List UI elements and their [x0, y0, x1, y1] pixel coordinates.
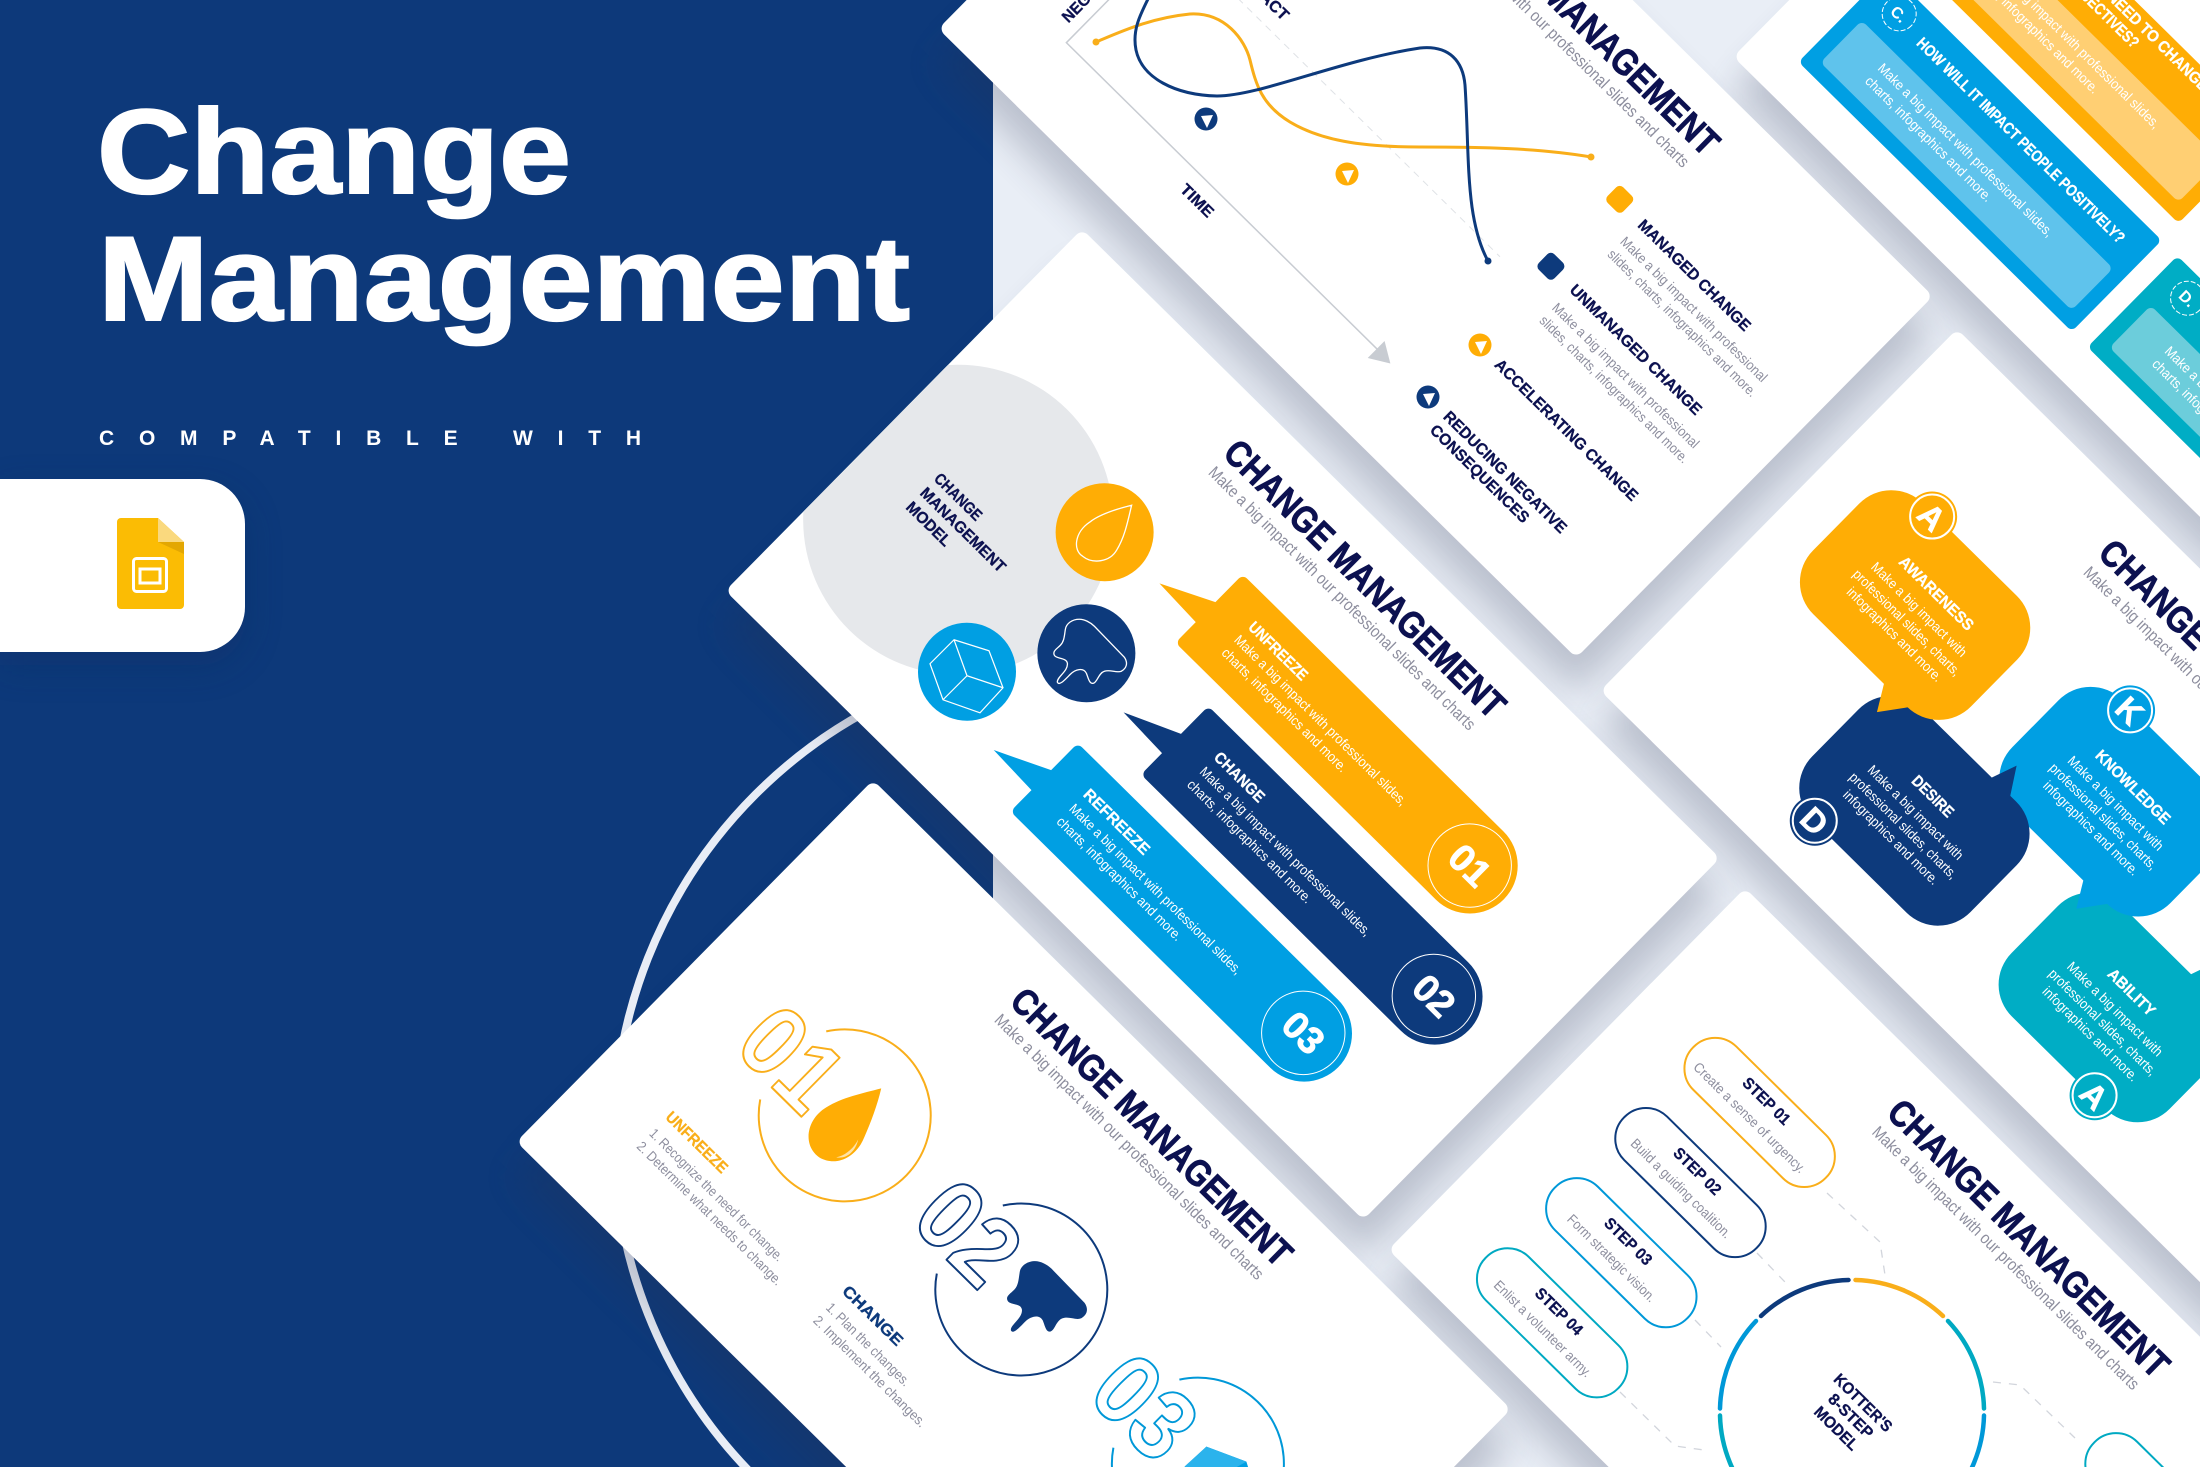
- title: Change: [97, 85, 571, 219]
- pill: step 01: Create a sense of urgency.: [1690, 1059, 1809, 1176]
- slide heading: Make a big impact with our professional slides and charts: [1868, 1123, 2143, 1394]
- bar: change: [1101, 667, 1502, 1064]
- bubble: knowledge: K: [2108, 689, 2151, 732]
- bar: refreeze: REFREEZE: [1080, 786, 1153, 859]
- step 01 circle and drop: [669, 939, 1017, 1287]
- bubble: ability: infographics and more.: [2039, 983, 2142, 1084]
- bubble: ability: A: [2073, 1074, 2116, 1117]
- bubble: desire: infographics and more.: [1840, 787, 1942, 888]
- bar: change: charts, infographics and more.: [1184, 776, 1316, 906]
- legend: unmanaged change: Make a big impact with professional: [1549, 299, 1703, 451]
- bubble: ability: ABILITY: [2104, 966, 2159, 1020]
- model label: CHANGE: [930, 470, 985, 525]
- model label: MANAGEMENT: [916, 485, 1009, 576]
- step 01 text: UNFREEZE: [662, 1109, 731, 1177]
- marker: navy legend: [1416, 386, 1440, 408]
- bubble: awareness: professional slides, charts,: [1850, 566, 1964, 679]
- step 02 text: [810, 1283, 959, 1430]
- bar: unfreeze: UNFREEZE: [1245, 619, 1311, 684]
- gray model circle: [803, 364, 1109, 670]
- pill: step 01: STEP 01: [1739, 1075, 1793, 1129]
- bubble: ability: Make a big impact with: [2064, 958, 2166, 1059]
- bubble: ability: professional slides, charts,: [2046, 965, 2160, 1079]
- pill: step 05: [2073, 1421, 2200, 1467]
- legend: reducing negative consequences: CONSEQUENCES: [1426, 422, 1532, 527]
- axis label: time: TIME: [1176, 181, 1217, 222]
- pill: step 02: STEP 02: [1669, 1145, 1724, 1199]
- centre label: [1804, 1371, 1895, 1462]
- marker: yellow legend: [1468, 334, 1492, 356]
- box: blue question: Make a big impact with professional slides,: [1875, 60, 2057, 240]
- chart axes: [1057, 0, 1609, 374]
- legend: accelerating change: ACCELERATING CHANGE: [1491, 356, 1641, 505]
- pill: step 02: Build a guiding coalition.: [1628, 1135, 1735, 1241]
- bar: refreeze: [971, 704, 1372, 1101]
- bubble: knowledge: professional slides, charts,: [2046, 760, 2161, 873]
- icon: melting splat: [1017, 582, 1159, 723]
- pill: step 01: [1672, 1025, 1847, 1199]
- bubble: knowledge: Make a big impact with: [2065, 752, 2167, 854]
- step 02 text: 2. Implement the changes.: [810, 1312, 930, 1430]
- icon: ice cube: [893, 602, 1040, 749]
- bubble: awareness: AWARENESS: [1895, 554, 1977, 635]
- model label: MODEL: [902, 499, 954, 550]
- pill: step 02: [1603, 1096, 1778, 1270]
- legend: unmanaged change: slides, charts, infographics and more.: [1536, 312, 1692, 466]
- centre label: MODEL: [1810, 1404, 1861, 1455]
- legend: unmanaged change: UNMANAGED CHANGE: [1566, 282, 1705, 419]
- model label: [902, 470, 1023, 590]
- curve: unmanaged change: [1135, 0, 1492, 264]
- box: blue question: C.: [1886, 3, 1910, 27]
- slide: questions (top right): [1715, 0, 2200, 722]
- box: teal question: [2087, 256, 2200, 617]
- bar: unfreeze: Make a big impact with professional slides,: [1231, 632, 1411, 809]
- title: Management: [98, 212, 910, 346]
- step 03 circle and cube: [1022, 1288, 1370, 1467]
- bar: refreeze: 03: [1273, 1004, 1332, 1063]
- marker: navy chart: [1194, 108, 1218, 130]
- bar: unfreeze: 01: [1439, 837, 1499, 896]
- bubble: desire: professional slides, charts,: [1846, 769, 1961, 882]
- slide heading: Make a big impact with our professional slides and charts: [991, 1010, 1267, 1284]
- box: blue question: HOW WILL IT IMPACT PEOPLE POSITIVELY?: [1913, 35, 2128, 247]
- bar: change: Make a big impact with professional slides,: [1197, 763, 1375, 939]
- legend: managed change: [1575, 184, 1793, 400]
- legend: reducing negative consequences: REDUCING NEGATIVE: [1440, 408, 1570, 537]
- slide heading: CHANGE MANAGEMENT: [1216, 432, 1514, 726]
- slide: change curve chart (top): [920, 0, 1951, 694]
- slide: three steps (bottom left): [498, 780, 1529, 1467]
- pill: step 03: STEP 03: [1600, 1215, 1655, 1269]
- box: yellow question: [1905, 0, 2200, 223]
- bubble: awareness: Make a big impact with: [1868, 559, 1971, 660]
- title: [97, 85, 910, 346]
- bubble: ability: [1964, 855, 2200, 1157]
- slide heading: CHANGE MANAGEMENT: [1003, 980, 1301, 1275]
- bubble: desire: Make a big impact with: [1865, 762, 1967, 863]
- bar: change: CHANGE: [1210, 749, 1268, 806]
- curve: managed change: [1092, 14, 1594, 161]
- centre label: 8-STEP: [1824, 1391, 1876, 1442]
- step 01 text: 1. Recognize the need for change.: [646, 1125, 787, 1264]
- pill: step 04: STEP 04: [1531, 1285, 1586, 1339]
- legend: managed change: MANAGED CHANGE: [1634, 217, 1754, 335]
- bar: unfreeze: charts, infographics and more.: [1219, 644, 1351, 775]
- slide: change management model (centre): [680, 202, 1738, 1256]
- navy background panel: [0, 0, 993, 1467]
- pill: step 04: [1465, 1236, 1640, 1410]
- bubble: awareness: [1764, 456, 2064, 756]
- pill: step 03: Form strategic vision.: [1564, 1211, 1659, 1305]
- legend: managed change: Make a big impact with professional: [1617, 233, 1771, 385]
- pill: step 03: [1534, 1166, 1709, 1340]
- bubble: awareness: A: [1910, 495, 1953, 538]
- bar: refreeze: Make a big impact with professional slides,: [1066, 800, 1246, 977]
- box: teal question: D.: [2175, 288, 2198, 311]
- bubble: knowledge: [1963, 652, 2200, 953]
- bubble: awareness: infographics and more.: [1844, 584, 1946, 685]
- bubble: desire: DESIRE: [1908, 773, 1957, 821]
- bubble: knowledge: infographics and more.: [2040, 777, 2142, 879]
- segmented ring: [1720, 1280, 1984, 1467]
- bar: unfreeze: [1138, 537, 1538, 933]
- step 02 text: CHANGE: [838, 1283, 906, 1350]
- bubble: desire: D: [1793, 800, 1836, 843]
- bubble: desire: [1764, 659, 2066, 961]
- slide heading: Make a big impact with our professional slides and charts: [1205, 463, 1479, 734]
- marker: yellow chart: [1336, 162, 1358, 186]
- box: blue question: charts, infographics and more.: [1862, 73, 1996, 205]
- step 02 text: 1. Plan the changes.: [823, 1299, 914, 1389]
- compatible with label: COMPATIBLE WITH: [99, 427, 641, 450]
- step 02 circle and splat: 02: [893, 1158, 1043, 1308]
- connectors: [1620, 1193, 2075, 1450]
- pill: step 04: Enlist a volunteer army.: [1491, 1277, 1595, 1380]
- step 01 text: 2. Determine what needs to change.: [634, 1138, 786, 1288]
- slide: ADKAR bubbles (right): [1582, 329, 2200, 1356]
- badge: google slides: [0, 479, 245, 665]
- legend: managed change: slides, charts, infographics and more.: [1605, 246, 1760, 400]
- centre label: KOTTER'S: [1830, 1371, 1895, 1436]
- icon: water drop: [1035, 463, 1174, 601]
- decorative ring: [620, 715, 858, 1467]
- slide: Kotter's 8-step model (bottom right): [1370, 888, 2200, 1467]
- bar: refreeze: charts, infographics and more.: [1054, 813, 1186, 944]
- bar: change: 02: [1403, 967, 1463, 1026]
- bubble: knowledge: KNOWLEDGE: [2092, 747, 2173, 828]
- icon: slides file: [117, 518, 184, 609]
- legend: unmanaged change: [1507, 251, 1725, 466]
- step 01 circle and drop: 01: [717, 984, 866, 1134]
- box: blue question: [1798, 0, 2162, 332]
- step 02 circle and splat: [845, 1113, 1193, 1461]
